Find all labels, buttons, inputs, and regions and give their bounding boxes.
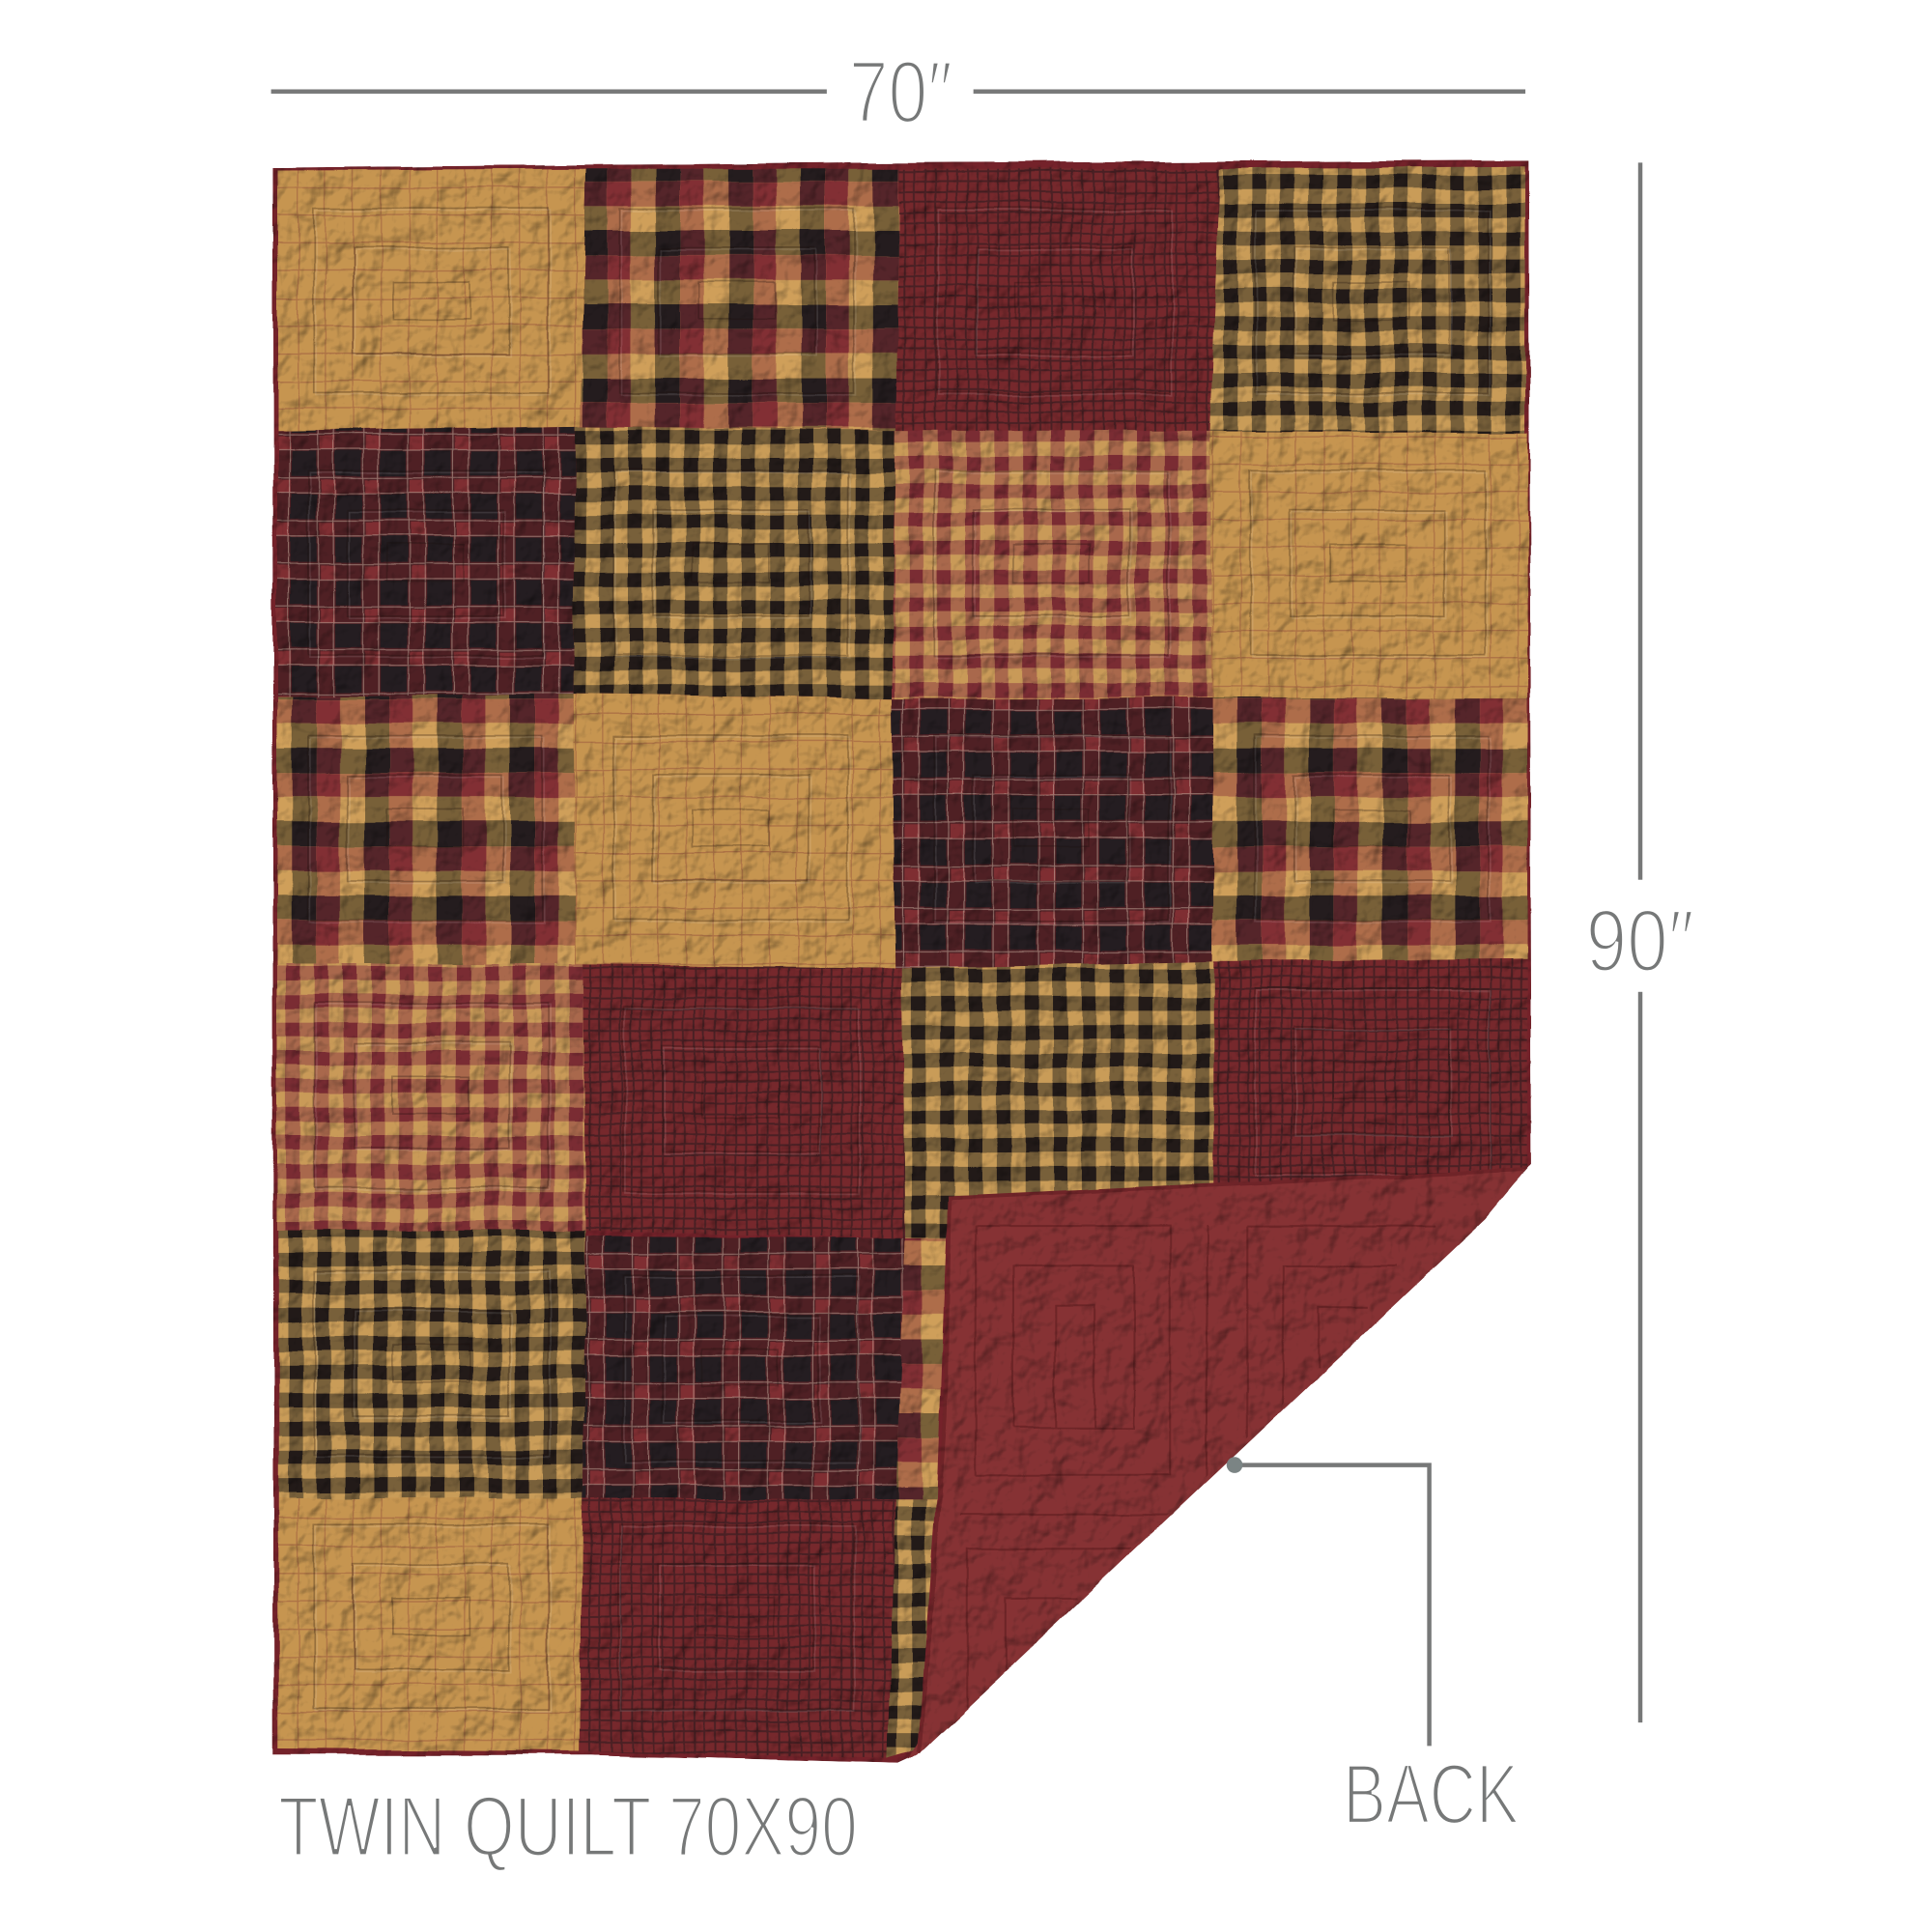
90 inch height dimension — [1586, 162, 1694, 1722]
back fabric — [909, 1168, 1528, 1759]
row 4 patches — [277, 958, 1528, 1238]
quilting stitches on front — [308, 209, 1491, 1711]
width line left — [271, 89, 827, 94]
height line top — [1638, 162, 1642, 880]
back callout — [1227, 1457, 1520, 1842]
width line right — [974, 89, 1525, 94]
callout label: BACK — [1343, 1747, 1520, 1842]
folded corner: back of quilt — [909, 1168, 1528, 1775]
row 3 patches — [277, 694, 1528, 969]
width label: 70″ — [849, 43, 952, 141]
70 inch width dimension — [271, 43, 1525, 141]
back quilting — [960, 1224, 1435, 1710]
callout leader line — [1235, 1465, 1430, 1746]
height line bottom — [1638, 992, 1642, 1722]
back binding — [920, 1171, 1523, 1752]
row 5 patches — [278, 1230, 947, 1501]
height label: 90″ — [1586, 893, 1694, 990]
row 6 patches — [278, 1498, 936, 1758]
row 1 patches — [277, 166, 1525, 433]
row 2 patches — [277, 426, 1528, 698]
quilt binding edge — [272, 160, 1531, 1763]
quilt — [272, 160, 1531, 1775]
callout dot — [1227, 1457, 1242, 1473]
product title: TWIN QUILT 70X90 — [278, 1778, 858, 1874]
